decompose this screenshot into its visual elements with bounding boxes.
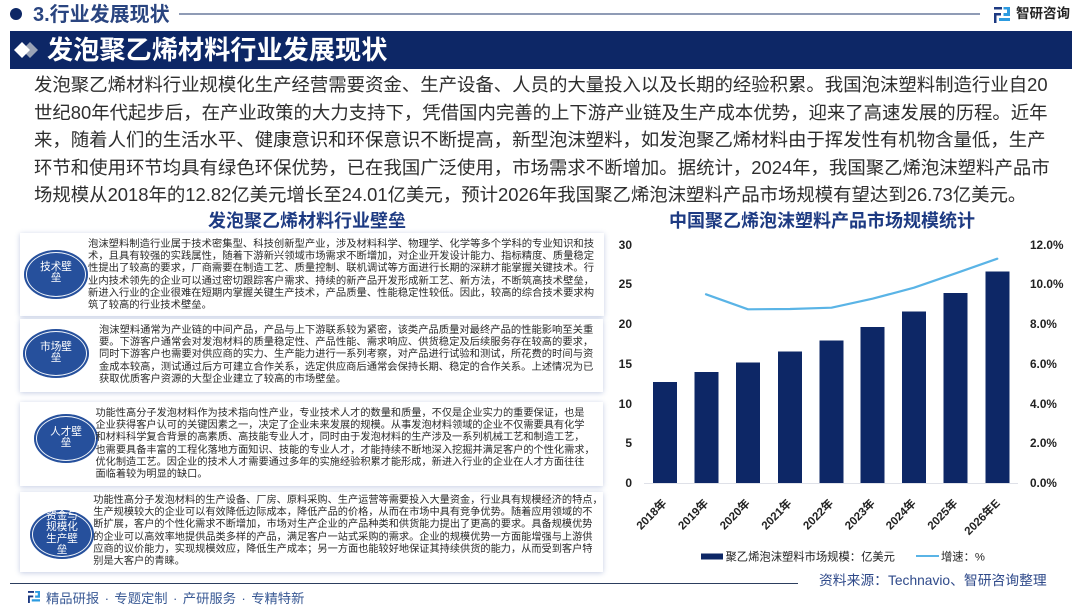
text: capital and scale barrier: 别是大客户的青睐。 [93, 556, 185, 567]
x axis labels: 2018年 [633, 496, 670, 532]
footer strip [28, 591, 304, 606]
text: technology barrier: 术，且具有较强的实践属性，随着下游新兴领域市场需求不断增加，对企业开发设计能力、指标精度、质量稳定 [88, 251, 594, 262]
text: market barrier: 要。下游客户通常会对发泡材料的质量稳定性、产品性能、需求响应、供货稳定及后续服务存在较高的要求， [99, 337, 593, 348]
badge: technology barrier [24, 250, 88, 299]
text: talent barrier: 企业获得客户认可的关键因素之一，决定了企业未来发展的规模。从事发泡材料领域的企业不仅需要具有化学 [96, 420, 584, 431]
text: talent barrier: 也需要具备丰富的工程化落地方面知识、技能的专业人才，才能持续不断地深入挖掘并满足客户的个性化需求， [96, 445, 595, 456]
panel: market barrier [20, 319, 603, 392]
text: capital and scale barrier: 功能性高分子发泡材料的生产设备、厂房、原料采购、生产运营等需要投入大量资金，行业具有规模经济的特点， [93, 495, 603, 506]
right axis labels: 4.0% [1030, 397, 1057, 411]
icon: footer logo [28, 591, 40, 603]
badge: technology barrier: 垒 [51, 272, 61, 284]
x axis labels: 2023年 [842, 496, 878, 532]
badge: talent barrier: 垒 [61, 437, 71, 449]
badge: technology barrier: 技术壁 [40, 261, 72, 273]
text: capital and scale barrier: 应商的议价能力，实现规模效应，降低生产成本；另一方面也能较好地保证其持续供货的能力，从而受到客户特 [93, 544, 592, 555]
intro paragraph: 来，随着人们的生活水平、健康意识和环保意识不断提高，新型泡沫塑料，如发泡聚乙烯材料由于挥发性有机物含量低，生产 [34, 129, 1046, 150]
right axis labels: 12.0% [1030, 238, 1064, 252]
badge: market barrier: 市场壁 [40, 341, 72, 353]
text: talent barrier: 优化制造工艺。因企业的技术人才需要通过多年的实施经验积累才能形成，新进入行业的企业在人才方面往往 [96, 457, 584, 468]
section heading: 3.行业发展现状 [33, 4, 170, 26]
left axis labels: 30 [619, 238, 632, 252]
text: market barrier: 金成本较高，测试通过后方可建立合作关系，选定供应商后通常会保持长期、稳定的合作关系。上述情况为已 [99, 362, 593, 373]
x axis labels: 2024年 [883, 496, 919, 532]
x axis labels [633, 496, 1003, 538]
banner title: 发泡聚乙烯材料行业发展现状 [47, 35, 387, 65]
section header [10, 4, 1070, 26]
icon: brand logo [994, 7, 1010, 23]
right axis labels: 2.0% [1030, 436, 1057, 450]
brand name: 智研咨询 [1016, 6, 1070, 21]
bars [653, 272, 1010, 483]
text: capital and scale barrier: 的企业可以高效率地提供品类多样的产品，满足客户一站式采购的需求。企业的规模优势一方面能增强与上游供 [93, 532, 592, 543]
legend: 增速：% [941, 550, 985, 564]
badge: talent barrier: 人才壁 [50, 426, 82, 438]
panel: technology barrier [20, 233, 604, 316]
text: market barrier [99, 324, 593, 385]
left axis labels: 15 [619, 357, 632, 371]
badge: capital and scale barrier: 规模化 [46, 521, 78, 533]
text: technology barrier: 性提出了较高的要求，厂商需要在制造工艺、质量控制、联机调试等方面进行长期的深耕才能掌握关键技术。行 [88, 263, 594, 274]
left axis labels: 25 [619, 277, 632, 291]
text: talent barrier: 和材料科学复合背景的高素质、高技能专业人才，同时由于发泡材料的生产涉及一系列机械工艺和制造工艺， [96, 432, 584, 443]
left axis labels: 20 [619, 317, 632, 331]
text: talent barrier [96, 407, 595, 480]
growth line [706, 259, 997, 309]
badge: capital and scale barrier [30, 510, 94, 559]
badge: capital and scale barrier: 垒 [57, 544, 67, 556]
text: technology barrier: 泡沫塑料制造行业属于技术密集型、科技创新型产业，涉及材料科学、物理学、化学等多个学科的专业知识和技 [88, 239, 594, 250]
x axis labels: 2020年 [717, 496, 753, 532]
text: talent barrier: 面临着较为明显的缺口。 [96, 469, 208, 480]
panel: capital and scale barrier [20, 492, 603, 572]
text: technology barrier: 筑了较高的行业技术壁垒。 [88, 300, 212, 311]
badge: talent barrier [34, 414, 98, 463]
left axis labels: 5 [625, 436, 632, 450]
text: market barrier: 泡沫塑料通常为产业链的中间产品，产品与上下游联系较为紧密，该类产品质量对最终产品的性能影响至关重 [99, 325, 593, 336]
text: technology barrier: 新进入行业的企业很难在短期内掌握关键生产技术，产品质量、性能稳定性较低。因此，较高的综合技术要求构 [88, 288, 594, 299]
left axis labels [619, 238, 632, 490]
title banner [10, 31, 1072, 69]
badge: market barrier [23, 329, 89, 378]
text: capital and scale barrier [93, 494, 603, 567]
footer slogan: 精品研报 · 专题定制 · 产研服务 · 专精特新 [46, 591, 304, 606]
intro paragraph: 环节和使用环节均具有绿色环保优势，已在我国广泛使用，市场需求不断增加。据统计，2024年，我国聚乙烯泡沫塑料产品市 [34, 156, 1050, 178]
text: capital and scale barrier: 生产规模较大的企业可以有效降低边际成本，降低产品的价格，从而在市场中具有竞争优势。随着应用领域的不 [93, 507, 592, 518]
intro paragraph: 世纪80年代起步后，在产业政策的大力支持下，凭借国内完善的上下游产业链及生产成本优势，迎来了高速发展的历程。近年 [34, 102, 1048, 122]
x axis labels: 2021年 [758, 496, 795, 532]
left axis labels: 0 [625, 476, 632, 490]
source note: 资料来源：Technavio、智研咨询整理 [819, 573, 1047, 588]
x axis labels: 2022年 [800, 496, 836, 532]
badge: market barrier: 垒 [51, 352, 61, 364]
x axis labels: 2025年 [924, 496, 961, 532]
section bullet [10, 8, 22, 20]
footer rule [10, 582, 798, 584]
text: capital and scale barrier: 断扩展，客户的个性化需求不断增加，市场对生产企业的产品种类和供货能力提出了更高的要求。具备规模优势 [93, 519, 592, 530]
chart: market size bars and growth line [618, 238, 1064, 564]
legend: 聚乙烯泡沫塑料市场规模：亿美元 [726, 550, 895, 564]
text: technology barrier: 业内技术领先的企业可以通过密切跟踪客户需求、持续的新产品开发形成新工艺、新方法，不断筑高技术壁垒， [88, 276, 594, 287]
x axis labels: 2019年 [675, 496, 711, 532]
intro paragraph: 发泡聚乙烯材料行业规模化生产经营需要资金、生产设备、人员的大量投入以及长期的经验积累。我国泡沫塑料制造行业自20 [34, 74, 1048, 95]
badge: capital and scale barrier: 生产壁 [46, 533, 78, 545]
badge: capital and scale barrier: 资金与 [46, 510, 78, 522]
text: talent barrier: 功能性高分子发泡材料作为技术指向性产业，专业技术人才的数量和质量，不仅是企业实力的重要保证，也是 [96, 408, 584, 419]
right axis labels [1030, 238, 1064, 490]
x axis labels: 2026年E [961, 496, 1003, 538]
right axis labels: 6.0% [1030, 357, 1057, 371]
intro paragraph: 场规模从2018年的12.82亿美元增长至24.01亿美元，预计2026年我国聚乙烯泡沫塑料产品市场规模有望达到26.73亿美元。 [34, 184, 1026, 205]
intro paragraph [34, 74, 1050, 205]
heading: industry barriers: 发泡聚乙烯材料行业壁垒 [208, 211, 406, 231]
right axis labels: 8.0% [1030, 317, 1057, 331]
legend [701, 550, 985, 564]
left axis labels: 10 [619, 397, 632, 411]
icon: double diamond [14, 42, 38, 58]
right axis labels: 10.0% [1030, 277, 1064, 291]
right axis labels: 0.0% [1030, 476, 1057, 490]
text: technology barrier [88, 238, 594, 311]
text: market barrier: 同时下游客户也需要对供应商的实力、生产能力进行一系列考察，对产品进行试验和测试，所花费的时间与资 [99, 349, 593, 360]
text: market barrier: 获取优质客户资源的大型企业建立了较高的市场壁垒。 [99, 374, 346, 385]
panel: talent barrier [20, 402, 603, 486]
heading: market size chart: 中国聚乙烯泡沫塑料产品市场规模统计 [669, 211, 975, 231]
